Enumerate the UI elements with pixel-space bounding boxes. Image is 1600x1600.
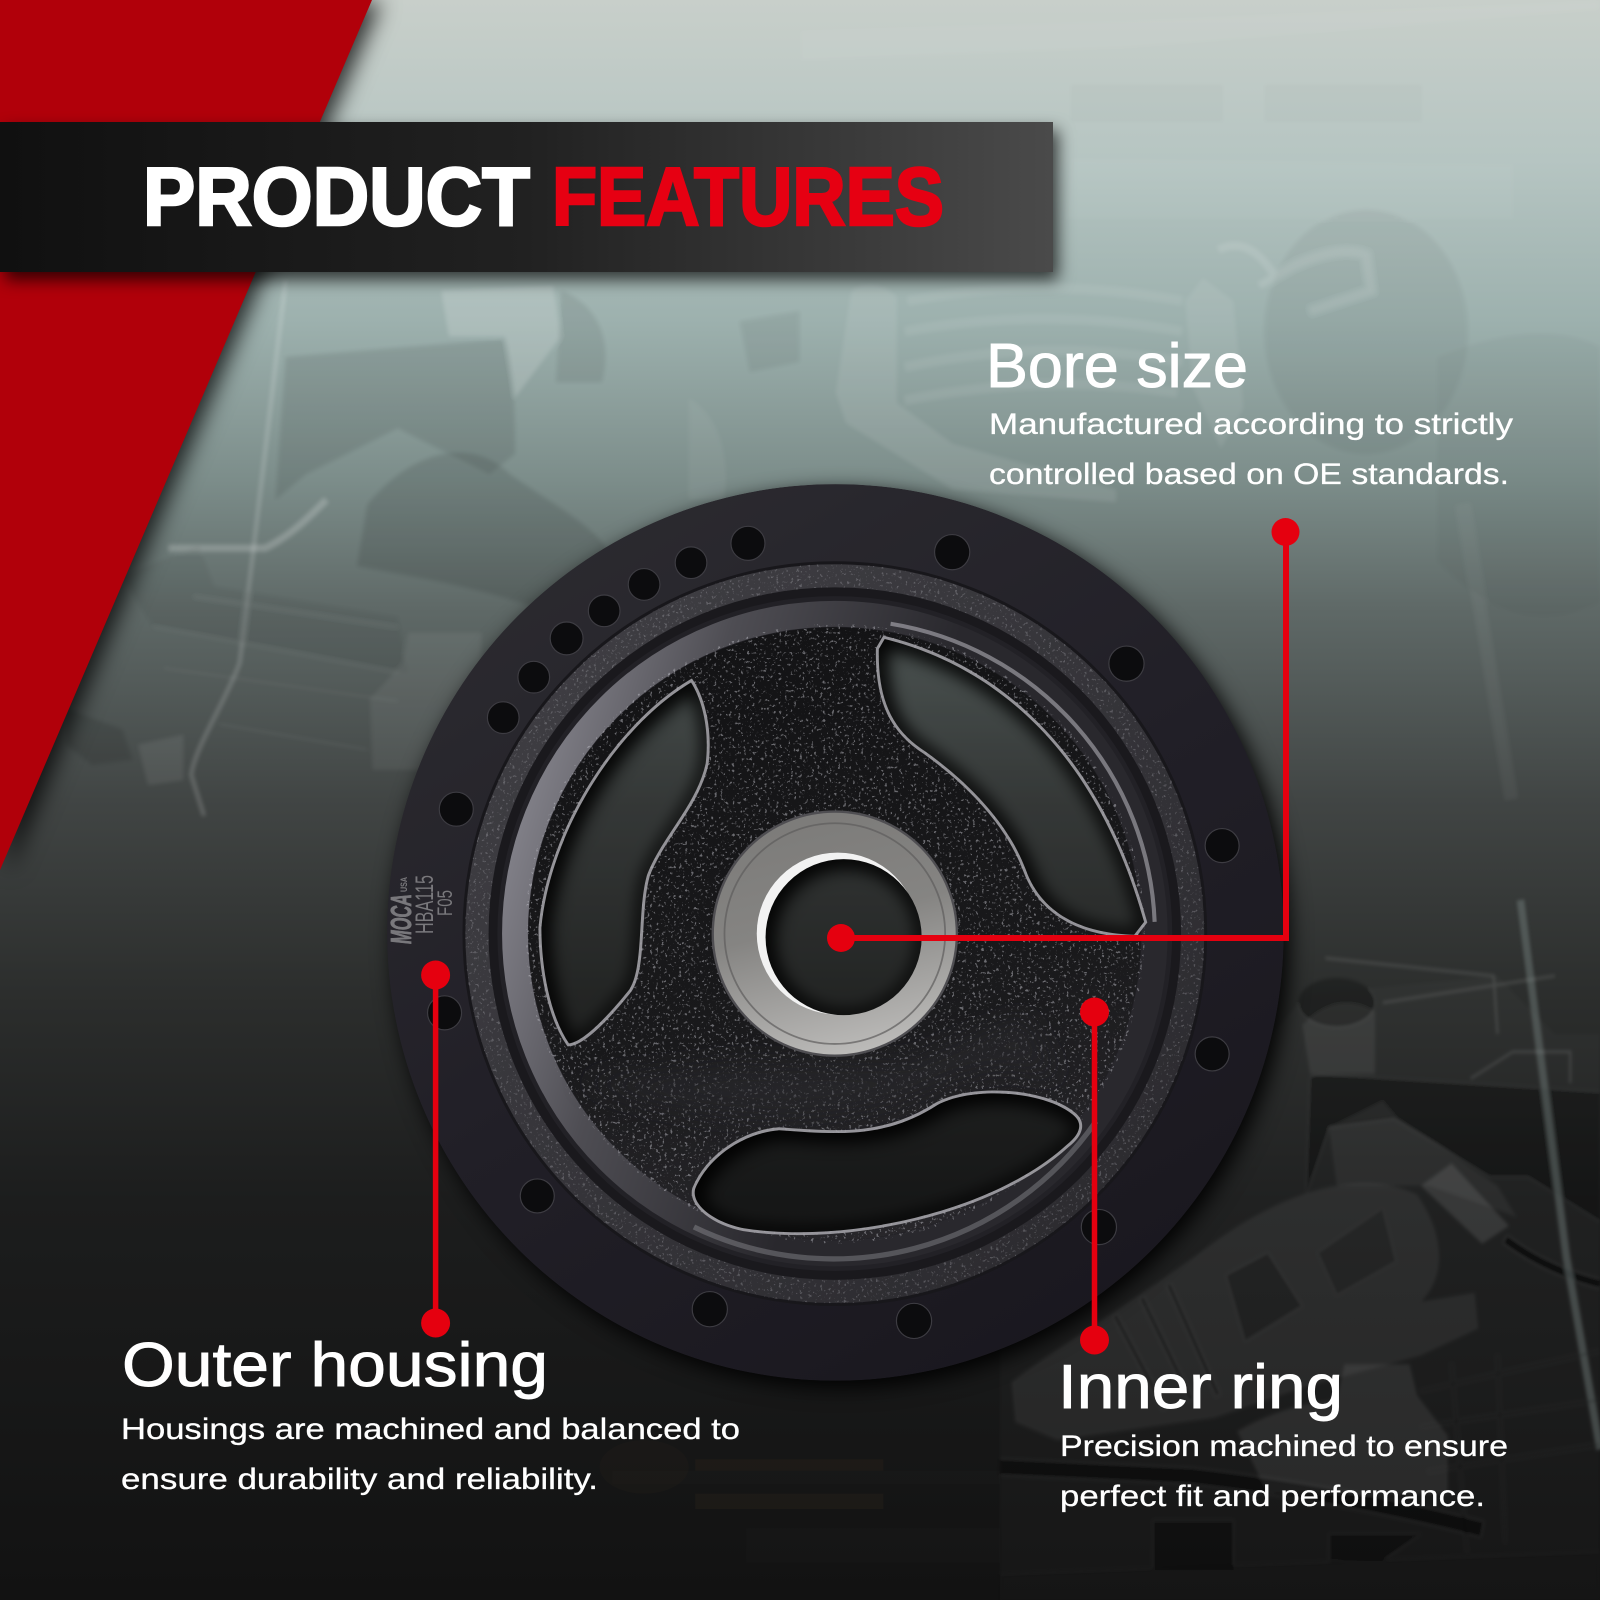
label: inner ring: perfect fit and performance.	[1060, 1480, 1485, 1513]
label: inner ring: Precision machined to ensure	[1060, 1430, 1508, 1463]
background: engine bay details bottom right	[1000, 900, 1600, 1600]
pulley outer ring band	[464, 563, 1206, 1305]
label: bore size: Bore size	[986, 332, 1248, 401]
label: bore size: controlled based on OE standards.	[989, 458, 1509, 491]
pulley hub casting	[528, 627, 1141, 1096]
title text	[143, 150, 944, 243]
label: inner ring	[1058, 1353, 1508, 1513]
pulley stamped markings: F05	[434, 890, 457, 916]
label: inner ring: Inner ring	[1058, 1353, 1343, 1422]
title banner	[0, 122, 1053, 272]
pulley bolt holes	[428, 526, 1239, 1339]
label: bore size	[986, 332, 1513, 491]
pulley stamped markings: HBA115	[411, 875, 439, 934]
background: faint engine bay details top right	[800, 0, 1600, 800]
background: faint engine bay details bottom centre	[600, 1440, 1000, 1563]
callout line: bore size	[827, 518, 1300, 952]
label: outer housing: Outer housing	[122, 1331, 548, 1400]
pulley outer flange	[387, 484, 1284, 1381]
title text: PRODUCT	[143, 150, 530, 243]
title text: FEATURES	[552, 150, 944, 243]
pulley stamped markings: USA	[399, 877, 409, 892]
crankshaft pulley product photo	[387, 484, 1284, 1381]
callout line: outer housing	[421, 960, 450, 1338]
label: outer housing: ensure durability and reliability.	[121, 1463, 598, 1496]
window edges	[541, 639, 1144, 1232]
label: outer housing	[121, 1331, 740, 1496]
shadow seen through pulley windows	[541, 639, 1144, 1232]
pulley stamped markings	[386, 875, 457, 944]
label: outer housing: Housings are machined and balanced to	[121, 1413, 740, 1446]
pulley stamped markings: MOCA	[386, 894, 418, 944]
centre bore metal boss	[713, 812, 957, 1056]
callout line: inner ring	[1080, 998, 1109, 1354]
red diagonal shape	[0, 0, 372, 870]
label: bore size: Manufactured according to strictly	[989, 408, 1513, 441]
pulley inner rim	[502, 601, 956, 1258]
background: faint engine bay details left	[66, 280, 800, 816]
